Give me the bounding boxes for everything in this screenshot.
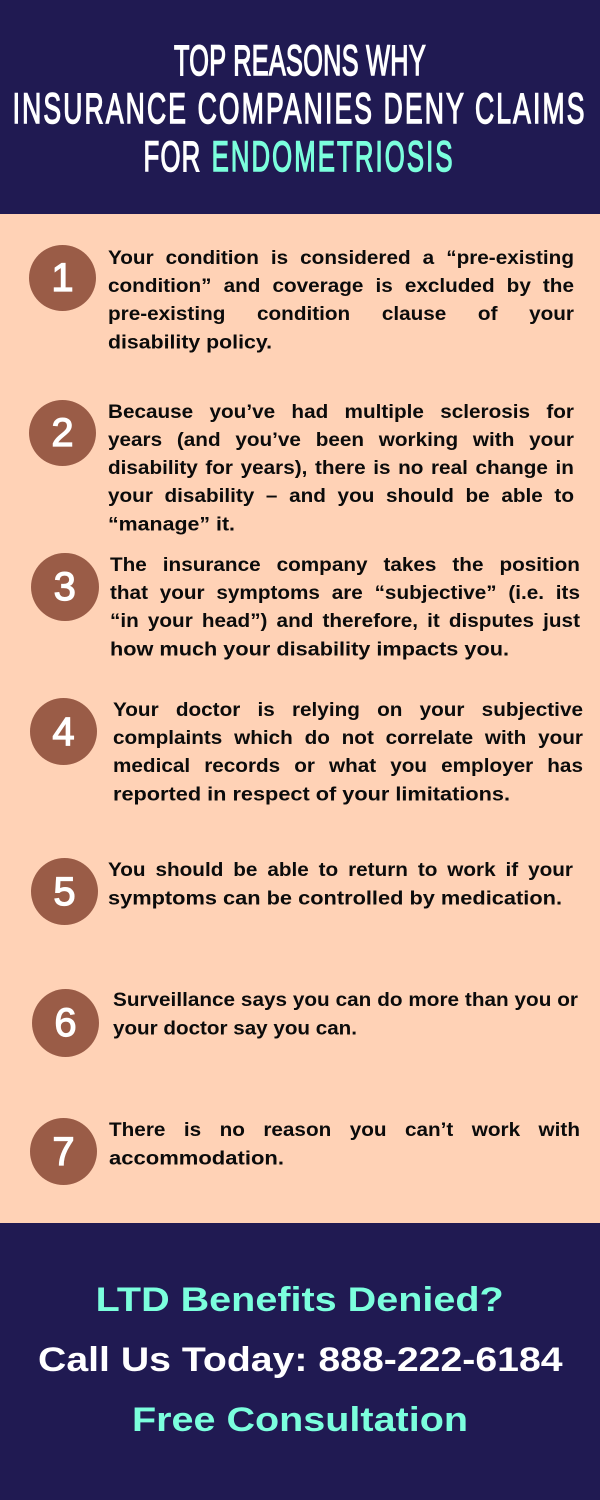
reason 2 text: Because you’ve had multiple sclerosis for [108,402,574,422]
number badge 2 [29,400,96,466]
number badge 1: 1 [51,256,74,300]
reason 1 text: pre-existing condition clause of your [108,304,574,324]
reason 2 [29,400,574,536]
reason 7 text [109,1120,580,1170]
reason 1 text: condition” and coverage is excluded by the [108,276,574,296]
reason 1 text: Your condition is considered a “pre-existing [108,248,574,268]
footer band [0,1222,600,1500]
number badge 5 [31,858,98,925]
reason 3 text: that your symptoms are “subjective” (i.e. its [110,582,580,604]
number badge 4: 4 [52,710,75,754]
call to action: Call Us Today: 888-222-6184 [38,1341,563,1379]
reason 4 text: reported in respect of your limitations. [113,784,510,806]
reason 3 text [110,554,580,660]
header band [0,0,600,214]
reason 7 [30,1118,580,1185]
reason 6 text: Surveillance says you can do more than you or [113,990,578,1010]
reason 3 text: “in your head”) and therefore, it disputes just [110,610,580,632]
reason 4 text: Your doctor is relying on your subjective [113,700,583,720]
reason 5 [31,858,573,925]
call to action: Free Consultation [132,1401,468,1439]
reason 4 [30,698,583,806]
number badge 2: 2 [51,411,74,455]
title: FOR [144,133,202,180]
number badge 7 [30,1118,97,1185]
reason 2 text: your disability – and you should be able to [108,486,574,506]
reason 6 text [113,990,578,1040]
reason 7 text: accommodation. [109,1148,284,1170]
reason 1 text: disability policy. [108,332,272,354]
reason 4 text [113,700,583,806]
reason 3 [31,553,580,660]
title: TOP REASONS WHY [174,37,426,85]
number badge 7: 7 [52,1130,75,1174]
number badge 3 [31,553,98,621]
reason 4 text: medical records or what you employer has [113,756,583,776]
reason 1 [29,245,574,354]
reason 2 text: years (and you’ve been working with your [108,430,574,450]
reason 5 text: You should be able to return to work if your [108,860,573,880]
number badge 3: 3 [54,565,76,609]
reason 4 text: complaints which do not correlate with your [113,728,583,748]
call to action [38,1281,563,1439]
reason 5 text [108,860,573,910]
number badge 6: 6 [54,1001,77,1045]
number badge 4 [30,698,97,765]
reason 7 text: There is no reason you can’t work with [109,1120,580,1140]
reason 2 text [108,402,574,536]
call to action: LTD Benefits Denied? [96,1281,504,1319]
reason 1 text [108,248,574,354]
reason 2 text: disability for years), there is no real change in [108,458,574,478]
reason 5 text: symptoms can be controlled by medication. [108,888,562,910]
title [13,37,587,180]
reason 6 [32,989,578,1057]
reason 3 text: how much your disability impacts you. [110,640,509,660]
number badge 5: 5 [53,870,76,914]
reason 6 text: your doctor say you can. [113,1018,357,1040]
number badge 1 [29,245,96,311]
number badge 6 [32,989,99,1057]
reason 3 text: The insurance company takes the position [110,554,580,576]
reason 2 text: “manage” it. [108,514,235,536]
